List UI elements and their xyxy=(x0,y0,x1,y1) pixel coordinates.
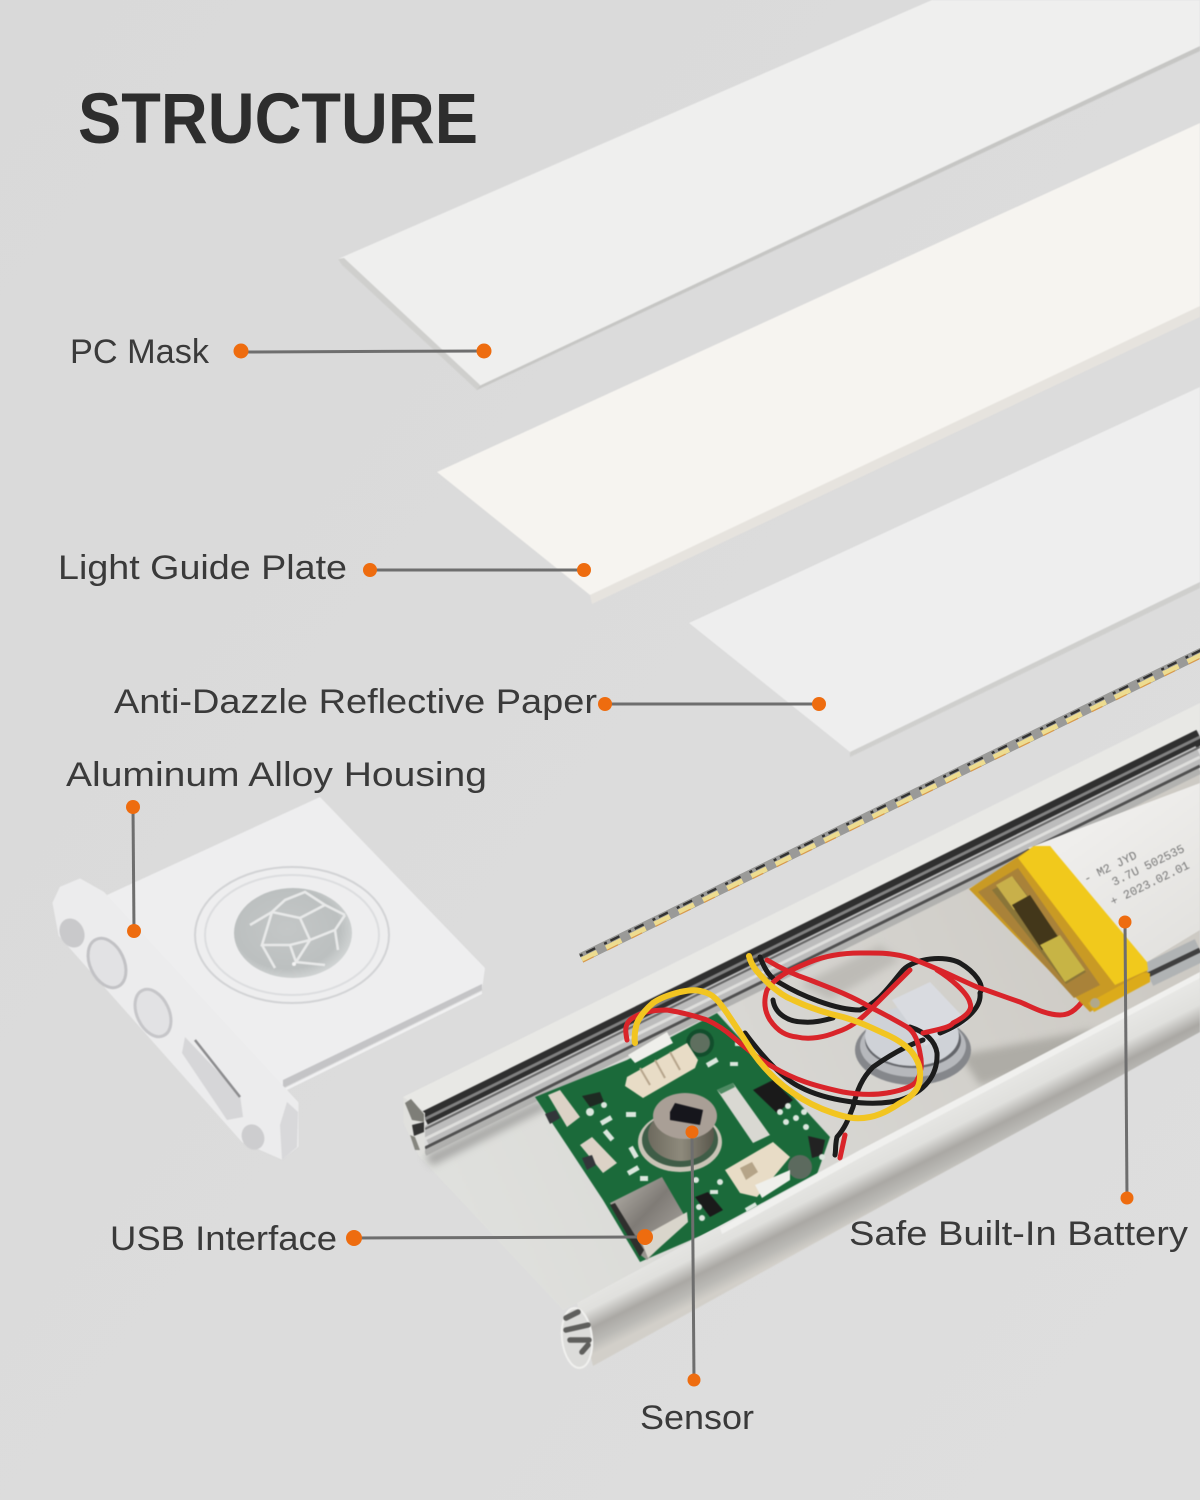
callout: Light Guide Plate: Light Guide Plate xyxy=(58,549,347,587)
end cap plate xyxy=(107,797,485,1095)
callout: Light Guide Plate xyxy=(58,549,591,587)
panel: PC mask strip xyxy=(338,0,1200,390)
battery label text: + 2023.02.01 xyxy=(1108,859,1192,909)
callout: Aluminum Alloy Housing: Aluminum Alloy Housing xyxy=(66,756,487,794)
LED strip xyxy=(579,644,1200,962)
end cap bar xyxy=(54,880,297,1158)
callout: USB Interface xyxy=(110,1220,653,1258)
battery rods xyxy=(1148,950,1200,975)
magnet disc xyxy=(855,982,971,1085)
callout: PC Mask: PC Mask xyxy=(70,333,210,371)
callout: PC Mask xyxy=(70,333,492,371)
lower rail xyxy=(559,972,1200,1369)
PIR sensor can xyxy=(638,1093,722,1172)
battery label text: - M2 JYD xyxy=(1082,849,1140,887)
panel: light guide plate strip xyxy=(437,123,1200,604)
callout: USB Interface: USB Interface xyxy=(110,1220,337,1258)
callout: Anti-Dazzle Reflective Paper: Anti-Dazzle Reflective Paper xyxy=(114,683,597,721)
callout: Safe Built-In Battery xyxy=(849,916,1188,1253)
callout: Sensor xyxy=(640,1126,754,1437)
battery label text: 3.7U 502535 xyxy=(1110,842,1187,890)
sensor end cap xyxy=(54,797,485,1160)
callout: Safe Built-In Battery: Safe Built-In Battery xyxy=(849,1215,1188,1253)
PIR lens xyxy=(195,867,389,1003)
connector: upper socket xyxy=(625,1032,698,1098)
circuit board xyxy=(535,1013,830,1262)
battery xyxy=(969,783,1200,1012)
small buttons xyxy=(545,1090,617,1173)
USB-C port xyxy=(610,1177,688,1260)
panel: aluminum housing profile xyxy=(403,703,1200,1310)
housing floor xyxy=(418,770,1200,1310)
wires xyxy=(626,953,1085,1158)
title: STRUCTURE xyxy=(78,80,478,159)
panel: anti-dazzle reflective paper strip xyxy=(689,387,1200,757)
floor reflections xyxy=(425,945,1110,1166)
callout: Anti-Dazzle Reflective Paper xyxy=(114,683,826,721)
upper rail xyxy=(403,703,1200,1156)
callout: Aluminum Alloy Housing xyxy=(66,756,487,938)
callout: Sensor: Sensor xyxy=(640,1399,754,1437)
battery label text xyxy=(1082,829,1195,915)
connector: lower socket xyxy=(725,1142,790,1198)
